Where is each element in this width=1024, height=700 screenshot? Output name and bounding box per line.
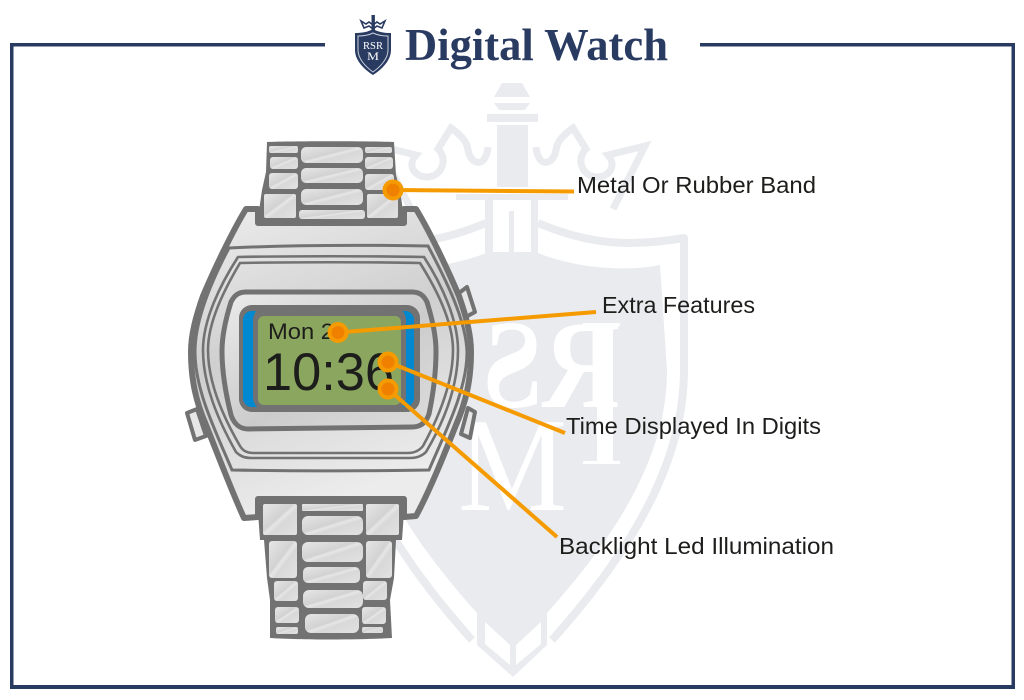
case inner lines xyxy=(195,245,467,471)
screen inner frame xyxy=(253,306,406,411)
watermark: shield body xyxy=(357,253,667,677)
logo crown xyxy=(361,21,385,29)
watermark: shield outline left xyxy=(340,223,486,640)
watermark: letter M: M xyxy=(458,391,567,539)
watermark: sword xyxy=(456,83,568,253)
label: Extra Features xyxy=(602,292,755,318)
top band links xyxy=(264,146,398,219)
watermark: emblem windows xyxy=(485,622,541,665)
watch side buttons xyxy=(187,287,475,440)
leader line xyxy=(388,362,565,433)
label: Backlight Led Illumination xyxy=(559,533,834,559)
display time text: 10:36 xyxy=(263,343,394,402)
logo shield inner line xyxy=(358,33,388,72)
logo shield xyxy=(355,29,391,75)
watermark: shield crest xyxy=(340,83,684,677)
bottom band silhouette xyxy=(257,498,405,640)
leader line xyxy=(338,312,596,332)
marker dot xyxy=(330,324,346,341)
bottom band links xyxy=(263,504,399,634)
label: Time Displayed In Digits xyxy=(566,413,821,439)
header logo xyxy=(355,15,391,75)
logo sword xyxy=(372,15,375,31)
logo monogram xyxy=(363,40,384,63)
marker dot xyxy=(380,380,396,398)
watermark: crown left xyxy=(379,128,488,209)
logo monogram: M xyxy=(367,49,379,63)
label: Metal Or Rubber Band xyxy=(577,172,816,198)
watermark: letter stem xyxy=(583,323,620,464)
callout: backlight led illumination xyxy=(380,380,834,559)
bottom band xyxy=(257,498,405,640)
title: Digital Watch xyxy=(405,20,668,70)
callout: time displayed in digits xyxy=(380,354,821,439)
leader line xyxy=(393,190,574,192)
marker dot xyxy=(380,354,396,370)
display date text: Mon 2 xyxy=(268,319,334,344)
watermark: mirrored letters RS: RS xyxy=(483,296,620,435)
watermark: crown right xyxy=(536,128,645,209)
callout: metal or rubber band xyxy=(384,172,816,198)
blue backlight xyxy=(243,311,414,407)
watermark: sword grip windows xyxy=(493,200,531,252)
screen frame xyxy=(239,305,420,412)
top band silhouette xyxy=(257,141,405,225)
illustration: digital watch xyxy=(187,141,475,640)
watermark: shield outline right xyxy=(538,223,684,640)
marker dot xyxy=(384,182,402,198)
logo monogram: RSR xyxy=(363,40,384,52)
watch case xyxy=(191,209,471,518)
leader line xyxy=(388,389,557,537)
callout: extra features xyxy=(330,292,755,341)
inner bezel xyxy=(222,292,436,429)
top band xyxy=(257,141,405,225)
lcd display xyxy=(258,316,401,405)
